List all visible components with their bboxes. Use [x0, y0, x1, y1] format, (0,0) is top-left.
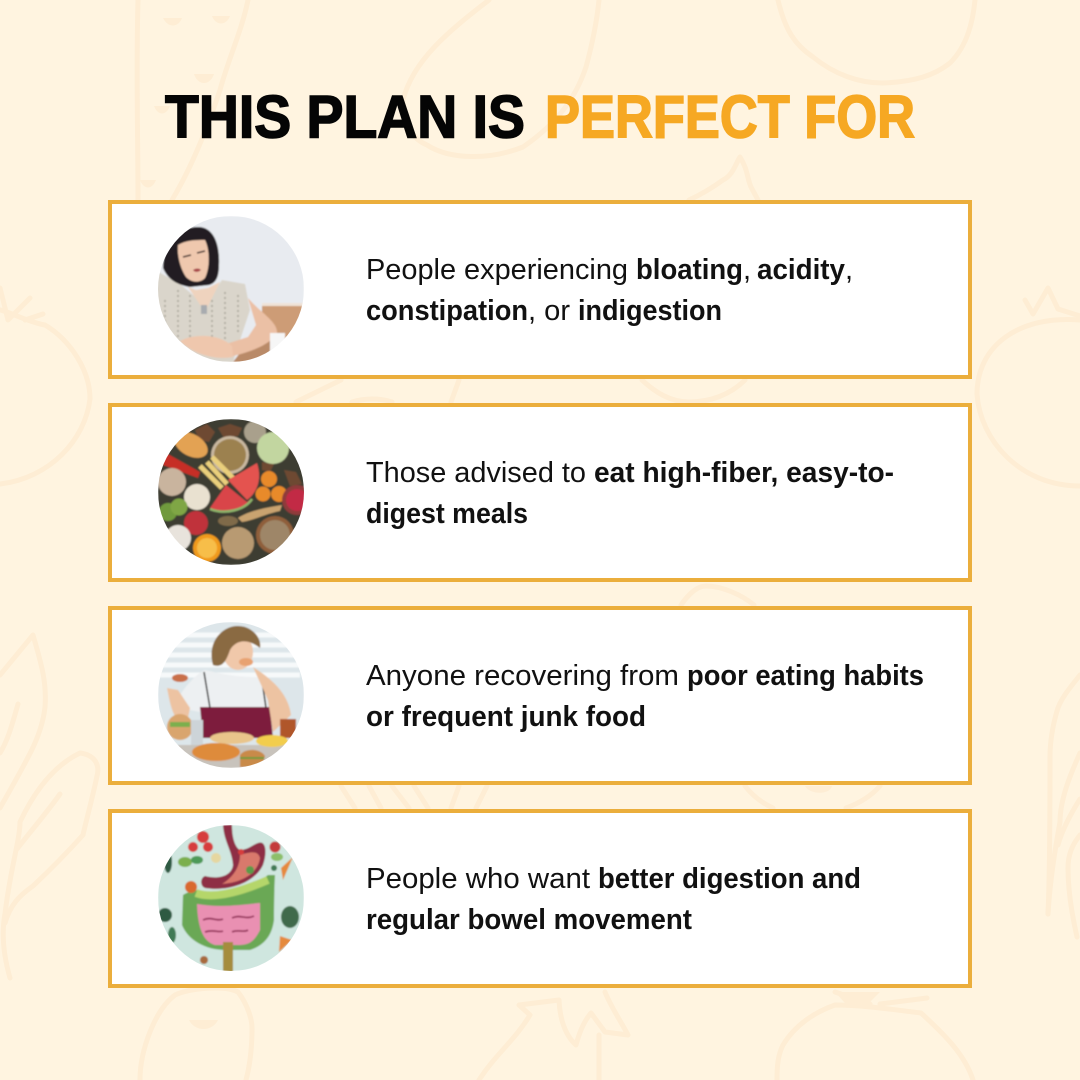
card text: constipation: [366, 295, 528, 327]
card text: Anyone recovering from: [366, 660, 679, 692]
card text: Those advised to: [366, 457, 586, 489]
card text: [366, 863, 861, 936]
card text: [366, 457, 894, 530]
title: THIS PLAN IS: [165, 84, 525, 150]
photo: woman holding stomach: [155, 216, 304, 365]
card text: better digestion and: [598, 863, 861, 895]
card text: [366, 660, 924, 733]
card text: ,: [743, 254, 751, 286]
panel: better digestion: [110, 811, 970, 986]
card text: or frequent junk food: [366, 701, 646, 733]
card text: People who want: [366, 863, 590, 895]
card text: indigestion: [578, 295, 722, 327]
title: [165, 84, 915, 150]
panel: high-fiber meals: [110, 405, 970, 580]
title: PERFECT FOR: [545, 84, 915, 150]
card text: poor eating habits: [687, 660, 924, 692]
photo: digestive system made of vegetables: [158, 825, 304, 972]
card text: eat high-fiber, easy-to-: [594, 457, 894, 489]
panel: poor eating habits: [110, 608, 970, 783]
card text: , or: [528, 295, 570, 327]
photo: woman eating junk food: [158, 622, 304, 768]
card text: digest meals: [366, 498, 528, 530]
card text: [366, 254, 853, 327]
card text: bloating: [636, 254, 743, 286]
card text: acidity: [757, 254, 845, 286]
photo: high-fiber foods: [158, 419, 312, 565]
card text: regular bowel movement: [366, 904, 692, 936]
card text: ,: [845, 254, 853, 286]
card text: People experiencing: [366, 254, 628, 286]
panel: digestive complaints: [110, 202, 970, 377]
